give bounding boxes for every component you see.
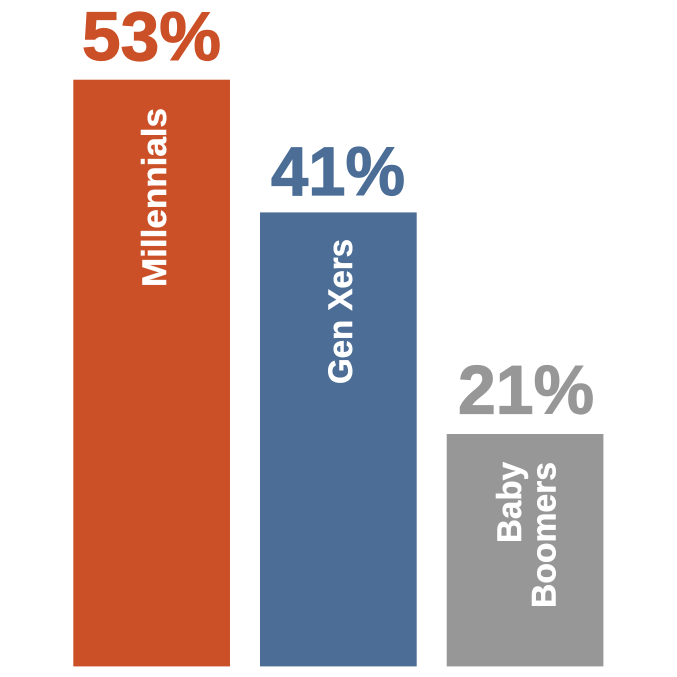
bar: Gen Xers: Gen Xers [322, 239, 360, 384]
bar: Baby Boomers [447, 434, 603, 666]
value: 41%: 41% [271, 133, 405, 210]
bar: Millennials [73, 80, 230, 666]
bar: Gen Xers [260, 212, 417, 666]
bar: Baby Boomers: Baby [491, 462, 529, 543]
bar: Millennials: Millennials [136, 108, 174, 287]
value: 53%: 53% [82, 0, 221, 75]
value: 21%: 21% [458, 352, 594, 428]
bar: Baby Boomers: Boomers [526, 462, 564, 608]
